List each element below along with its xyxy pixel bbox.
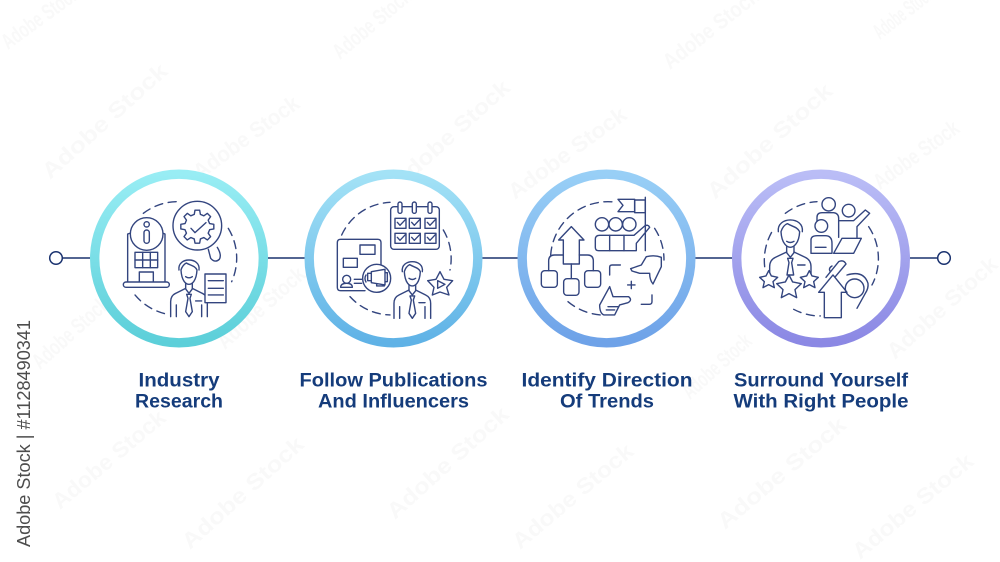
text: Adobe Stock <box>382 401 514 524</box>
ring: step 4 <box>737 174 905 343</box>
text: Adobe Stock <box>507 438 639 554</box>
text: Adobe Stock <box>27 291 114 374</box>
label: surround yourself with right people: With Right People <box>734 392 908 412</box>
label: industry research: Industry <box>138 370 220 392</box>
text: Adobe Stock <box>677 328 757 404</box>
text: Adobe Stock <box>387 74 515 194</box>
icon: calendar, media card and influencer <box>337 202 453 318</box>
label: identify direction of trends: Of Trends <box>560 392 654 412</box>
text: Adobe Stock <box>847 448 979 562</box>
panel: industry research <box>95 174 263 412</box>
text: Adobe Stock <box>188 90 305 184</box>
label: surround yourself with right people: Surround Yourself <box>734 370 909 392</box>
text: Adobe Stock <box>702 77 838 204</box>
label: identify direction of trends <box>522 370 692 412</box>
panel: identify direction of trends <box>522 174 692 412</box>
text: Adobe Stock <box>37 57 173 184</box>
ring: step 1 <box>95 174 263 343</box>
panel: surround yourself with right people <box>734 174 909 412</box>
label: follow publications and influencers <box>300 370 488 412</box>
ring: step 2 <box>309 174 478 343</box>
label: follow publications and influencers: Follow Publications <box>300 370 488 392</box>
panel: follow publications and influencers <box>300 174 488 412</box>
text: Adobe Stock <box>47 404 171 514</box>
text: Adobe Stock <box>212 261 311 354</box>
label: follow publications and influencers: And Influencers <box>318 392 469 412</box>
label: industry research <box>135 370 223 412</box>
text: Adobe Stock <box>503 101 632 204</box>
label: industry research: Research <box>135 392 223 412</box>
text: Adobe Stock <box>712 411 851 534</box>
label: surround yourself with right people <box>734 370 909 412</box>
text: Adobe Stock <box>882 251 1000 364</box>
text: Adobe Stock <box>868 115 964 194</box>
text: Adobe Stock <box>177 431 309 554</box>
label: identify direction of trends: Identify Direction <box>522 370 692 392</box>
icon: building, magnifier and analyst <box>123 201 237 317</box>
timeline connector line <box>50 252 950 264</box>
stock reference text: Adobe Stock | #1128490341 <box>14 320 34 547</box>
icon: leader with stars, team and growth arrow <box>760 198 878 318</box>
ring: step 3 <box>522 174 691 343</box>
icon: flowchart arrow, team flag and framing hands <box>541 197 664 315</box>
